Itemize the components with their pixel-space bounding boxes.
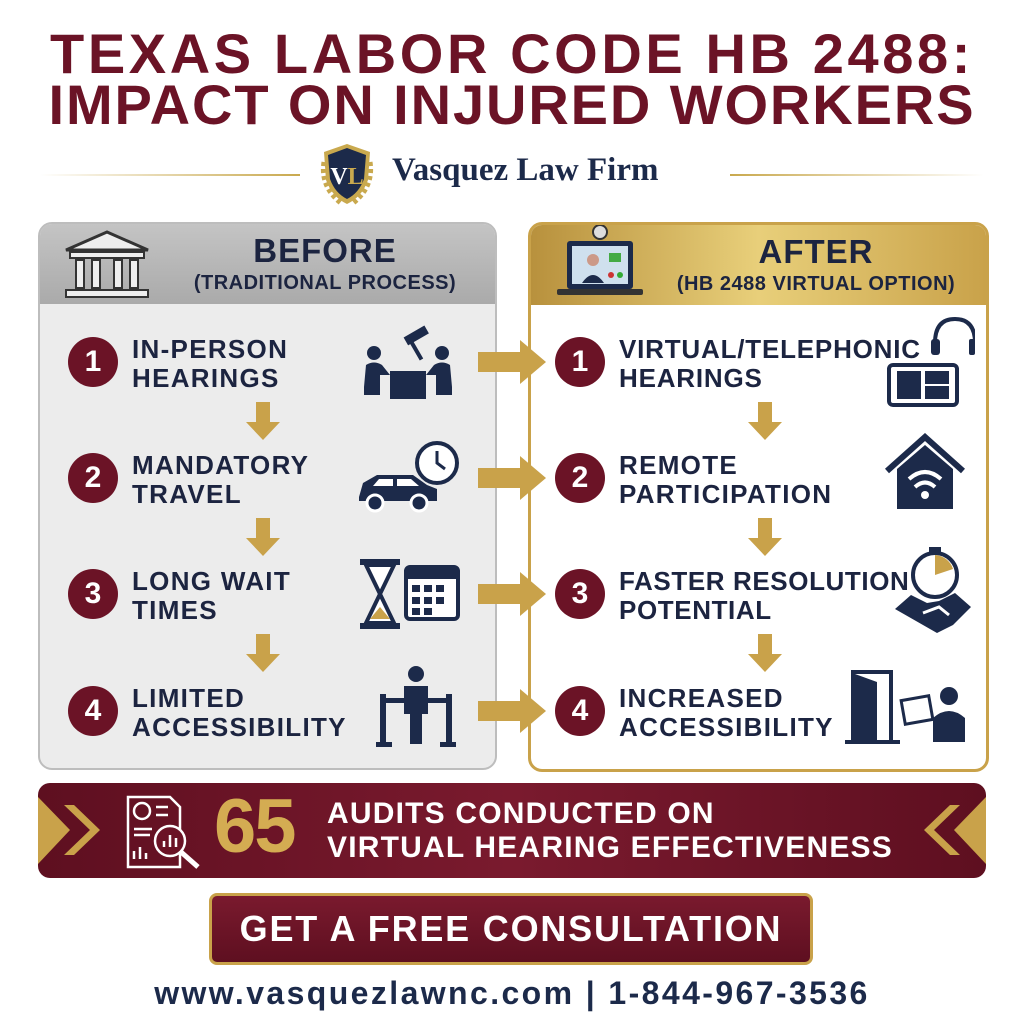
step 3 after: 3	[572, 577, 588, 610]
icon: report magnifier	[126, 796, 200, 869]
title	[49, 22, 975, 136]
step 4 before: 4	[85, 694, 101, 727]
stat number: 65	[214, 784, 295, 869]
icon: stopwatch handshake	[895, 547, 971, 633]
icon: hourglass calendar	[360, 559, 460, 629]
step 4 after	[555, 670, 965, 744]
step 1 before: IN-PERSON	[132, 334, 288, 364]
step 4 after: ACCESSIBILITY	[619, 712, 834, 742]
step 4 after: INCREASED	[619, 683, 784, 713]
contact info: www.vasquezlawnc.com | 1-844-967-3536	[154, 975, 870, 1011]
down arrows left	[246, 402, 280, 672]
logo	[52, 144, 972, 204]
icon: judge meeting	[364, 326, 452, 399]
icon: laptop video	[557, 225, 643, 295]
logo: Vasquez Law Firm	[392, 152, 658, 188]
chevrons right	[924, 797, 986, 864]
panel: after	[528, 222, 989, 772]
icon: car clock	[359, 441, 459, 512]
step 3 after: POTENTIAL	[619, 595, 772, 625]
step 1 after: VIRTUAL/TELEPHONIC	[619, 334, 921, 364]
step 4 before: ACCESSIBILITY	[132, 712, 347, 742]
before header	[40, 224, 495, 304]
step 2 before	[68, 441, 459, 512]
step 1 after	[555, 317, 975, 407]
icon: house wifi	[885, 433, 965, 509]
stat banner	[38, 783, 986, 878]
step 3 before: TIMES	[132, 595, 218, 625]
icon: headset tablet	[887, 317, 975, 407]
stat text	[327, 797, 893, 864]
step 1 before	[68, 326, 452, 399]
step 4 before: LIMITED	[132, 683, 245, 713]
step 4 before	[68, 666, 456, 747]
before header: (TRADITIONAL PROCESS)	[194, 272, 456, 294]
step 2 after: REMOTE	[619, 450, 738, 480]
logo: VL	[330, 164, 364, 190]
step 3 before	[68, 559, 460, 629]
icon: barrier person	[376, 666, 456, 747]
down arrows right	[748, 402, 782, 672]
button: free consultation: GET A FREE CONSULTATION	[240, 908, 782, 949]
stat text: VIRTUAL HEARING EFFECTIVENESS	[327, 831, 893, 864]
button: free consultation	[209, 893, 813, 965]
step 2 before: 2	[85, 461, 101, 494]
step 2 after: 2	[572, 461, 588, 494]
step 4 after: 4	[572, 694, 588, 727]
step 2 after	[555, 433, 965, 509]
step 2 before: MANDATORY	[132, 450, 309, 480]
step 1 before: HEARINGS	[132, 363, 280, 393]
after header	[531, 225, 986, 305]
stat text: AUDITS CONDUCTED ON	[327, 797, 715, 830]
step 1 before: 1	[85, 345, 101, 378]
horizontal arrows	[478, 340, 546, 733]
after header: AFTER	[758, 233, 874, 270]
panel: before	[38, 222, 497, 770]
before header: BEFORE	[253, 232, 397, 269]
title: TEXAS LABOR CODE HB 2488:	[50, 22, 974, 85]
icon: courthouse	[65, 230, 149, 298]
step 1 after: HEARINGS	[619, 363, 763, 393]
step 3 after: FASTER RESOLUTION	[619, 566, 909, 596]
step 2 before: TRAVEL	[132, 479, 242, 509]
title: IMPACT ON INJURED WORKERS	[49, 73, 975, 136]
after header: (HB 2488 VIRTUAL OPTION)	[677, 273, 955, 295]
icon: door person	[845, 670, 965, 744]
step 1 after: 1	[572, 345, 588, 378]
chevrons left	[38, 797, 100, 864]
step 3 after	[555, 547, 971, 633]
step 3 before: LONG WAIT	[132, 566, 291, 596]
step 3 before: 3	[85, 577, 101, 610]
step 2 after: PARTICIPATION	[619, 479, 832, 509]
